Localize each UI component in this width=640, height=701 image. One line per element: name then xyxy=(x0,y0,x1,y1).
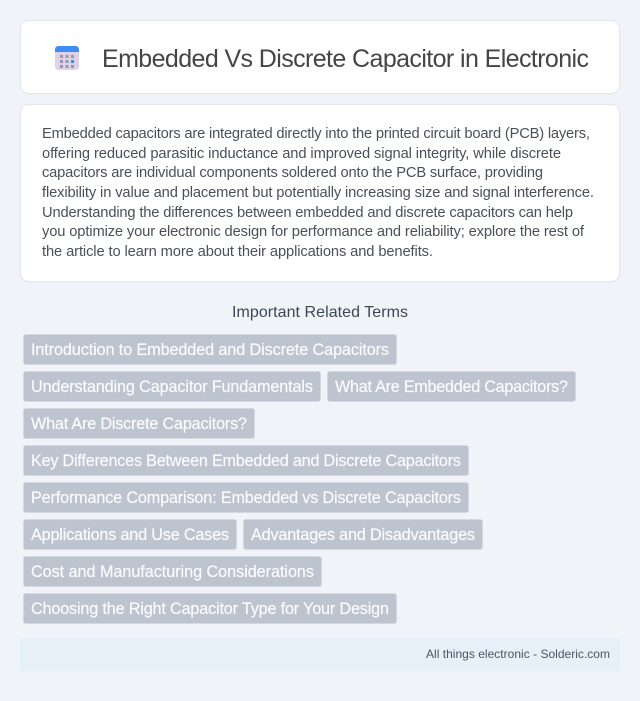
description text: the article to learn more about their applications and benefits. xyxy=(42,244,433,260)
chip: introduction: Introduction to Embedded and Discrete Capacitors xyxy=(31,341,389,359)
panel: title card xyxy=(20,20,620,94)
chip: applications: Applications and Use Cases xyxy=(31,526,229,544)
description text: you optimize your electronic design for performance and reliability; explore the rest of xyxy=(42,224,585,240)
description text: capacitors are individual components soldered onto the PCB surface, providing xyxy=(42,165,543,181)
footer: All things electronic - Solderic.com xyxy=(426,647,610,661)
footer xyxy=(20,638,620,671)
description text xyxy=(42,126,594,260)
chip: introduction xyxy=(24,334,396,364)
title: Embedded Vs Discrete Capacitor in Electronic xyxy=(102,45,589,73)
chip: advantages xyxy=(244,520,482,550)
chip: cost: Cost and Manufacturing Considerations xyxy=(31,563,314,581)
description text: Embedded capacitors are integrated directly into the printed circuit board (PCB) layers, xyxy=(42,126,590,142)
chip: performance: Performance Comparison: Embedded vs Discrete Capacitors xyxy=(31,489,461,507)
icon: calendar grid xyxy=(55,46,79,70)
chip: performance xyxy=(24,482,468,512)
panel: related terms chips xyxy=(24,334,576,624)
chip: fundamentals: Understanding Capacitor Fundamentals xyxy=(31,378,313,396)
chip: cost xyxy=(24,556,322,586)
chip: choosing xyxy=(24,594,396,624)
chip: embedded: What Are Embedded Capacitors? xyxy=(335,378,568,396)
description text: flexibility in value and placement but potentially increasing size and signal interference. xyxy=(42,185,594,201)
chip: discrete xyxy=(24,408,254,438)
description text: Understanding the differences between embedded and discrete capacitors can help xyxy=(42,205,573,221)
chip: advantages: Advantages and Disadvantages xyxy=(251,526,475,544)
chip: choosing: Choosing the Right Capacitor Type for Your Design xyxy=(31,600,389,618)
chip: embedded xyxy=(328,372,576,402)
chip: applications xyxy=(24,520,236,550)
description text: offering reduced parasitic inductance and improved signal integrity, while discrete xyxy=(42,146,561,162)
chip: discrete: What Are Discrete Capacitors? xyxy=(31,415,247,433)
panel: description xyxy=(20,104,620,282)
chip: key differences xyxy=(24,446,468,476)
chip: key differences: Key Differences Between Embedded and Discrete Capacitors xyxy=(31,452,461,470)
chip: fundamentals xyxy=(24,372,320,402)
heading: important related terms: Important Related Terms xyxy=(232,304,408,321)
